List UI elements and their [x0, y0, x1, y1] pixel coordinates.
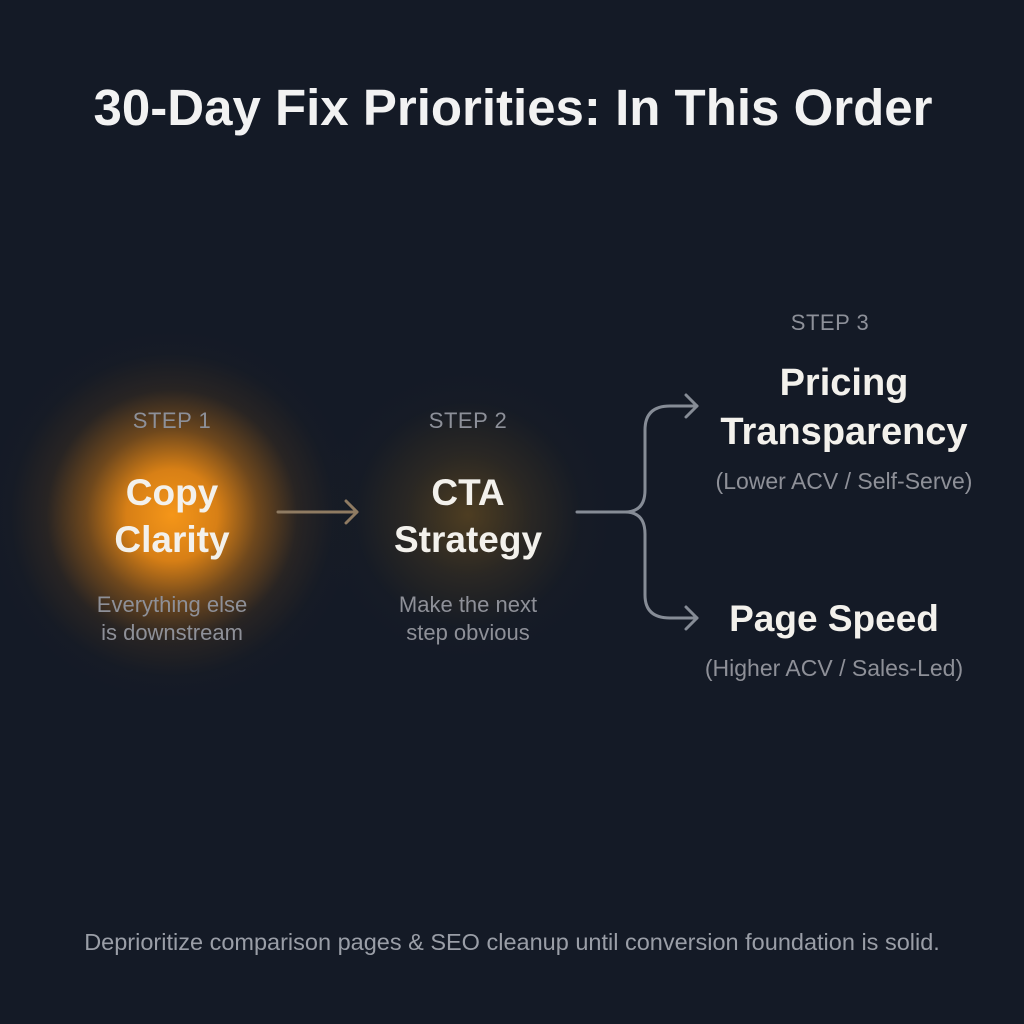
step 2 block [394, 408, 542, 645]
step 3 option: pricing transparency: Transparency [720, 411, 968, 453]
step 3 option: page speed: (Higher ACV / Sales-Led) [705, 655, 963, 681]
glow: step 2 [318, 365, 618, 665]
title: 30-Day Fix Priorities: In This Order [94, 79, 932, 136]
step 3 option: pricing transparency: (Lower ACV / Self-Serve) [716, 468, 972, 494]
arrow: branching to step 3 [577, 395, 697, 629]
step 1 description: is downstream [101, 620, 243, 645]
step 1 title: Copy [126, 472, 218, 513]
step 2 description: step obvious [406, 620, 530, 645]
step 1 title: Clarity [114, 519, 230, 560]
step 2 description [399, 592, 537, 645]
step 2 title: Strategy [394, 519, 542, 560]
step 2 title: CTA [431, 472, 505, 513]
step 2 description: Make the next [399, 592, 537, 617]
step 1 label: STEP 1 [133, 408, 211, 433]
glow: step 1 [0, 325, 362, 705]
step 1 description: Everything else [97, 592, 247, 617]
step 1 title [114, 472, 230, 560]
step 3 option: page speed: Page Speed [729, 598, 939, 639]
arrow: step 1 to step 2 [278, 501, 357, 523]
step 2 title [394, 472, 542, 560]
step 3 label: STEP 3 [791, 310, 869, 335]
step 3 option: pricing transparency: Pricing [780, 362, 908, 404]
step 1 block [97, 408, 247, 645]
step 3 option: page speed [705, 598, 963, 681]
step 2 label: STEP 2 [429, 408, 507, 433]
footer note: Deprioritize comparison pages & SEO cleanup until conversion foundation is solid. [84, 929, 940, 955]
step 1 description [97, 592, 247, 645]
step 3 option: pricing transparency [716, 362, 972, 494]
